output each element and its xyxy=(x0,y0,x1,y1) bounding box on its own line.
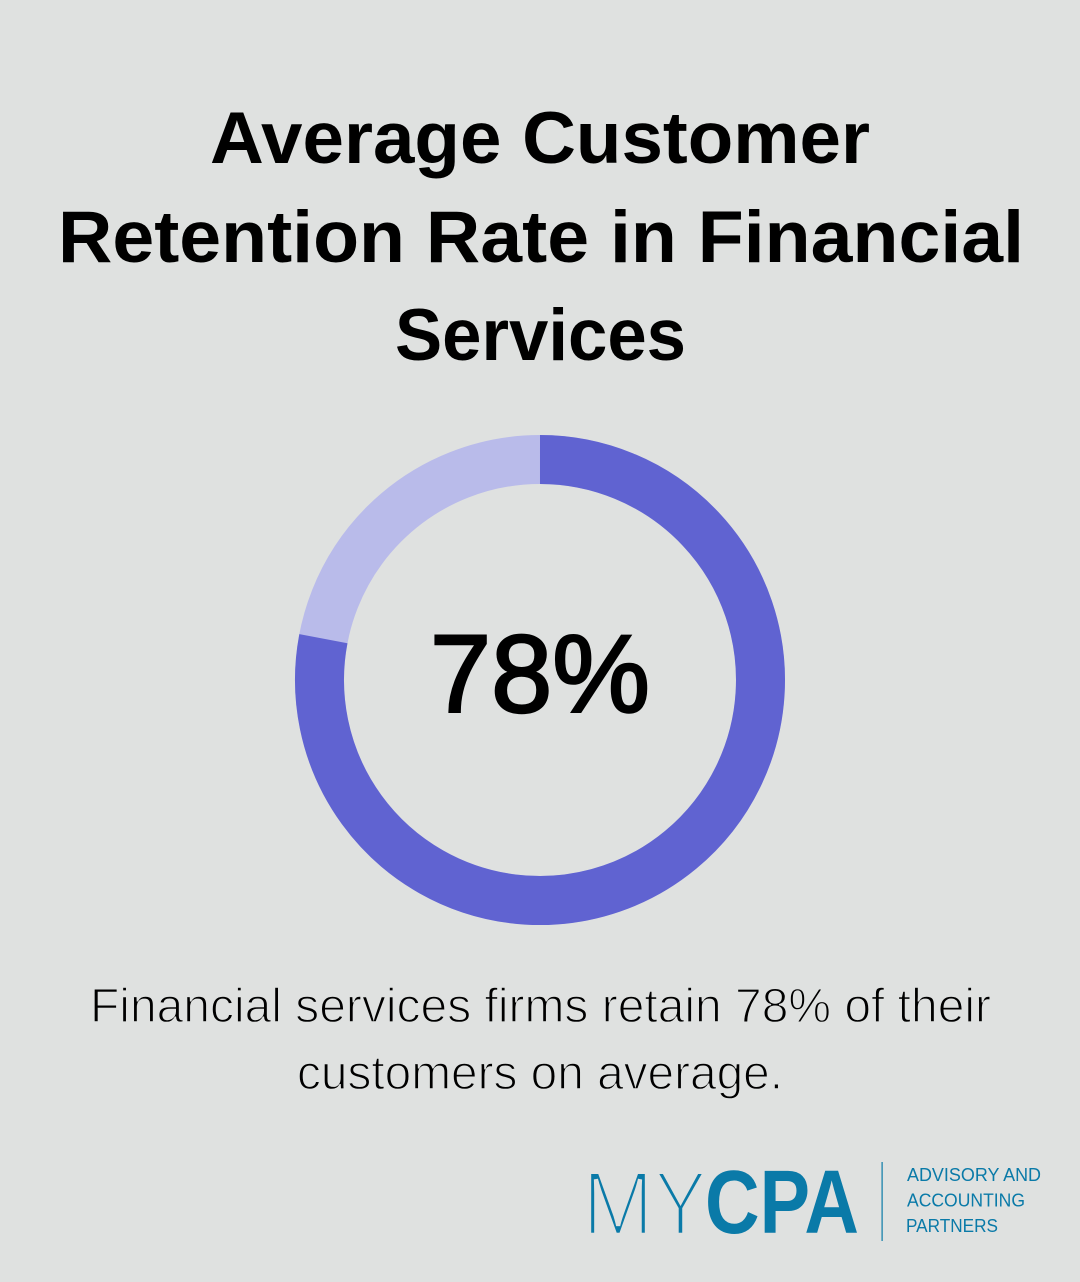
title: Services xyxy=(395,295,686,376)
description text: customers on average. xyxy=(297,1047,783,1100)
title: Retention Rate in Financial xyxy=(58,197,1024,278)
logo wordmark: Y xyxy=(654,1153,707,1255)
logo tagline: ACCOUNTING xyxy=(907,1190,1025,1210)
donut value: 78% xyxy=(430,613,650,736)
donut chart: 78% xyxy=(319,460,760,901)
title xyxy=(58,98,1024,376)
description text: Financial services firms retain 78% of their xyxy=(90,980,991,1033)
title: Average Customer xyxy=(210,98,870,179)
logo wordmark: M xyxy=(582,1153,654,1255)
logo wordmark: CPA xyxy=(705,1153,859,1253)
logo tagline xyxy=(906,1165,1041,1236)
description text xyxy=(90,980,991,1100)
donut arc: 78% xyxy=(319,460,760,901)
logo: MyCPA xyxy=(582,1153,1041,1255)
logo tagline: ADVISORY AND xyxy=(907,1165,1041,1185)
logo tagline: PARTNERS xyxy=(906,1216,998,1236)
logo divider xyxy=(882,1162,883,1241)
donut track: remaining 22% xyxy=(320,460,760,900)
logo wordmark xyxy=(582,1153,859,1255)
